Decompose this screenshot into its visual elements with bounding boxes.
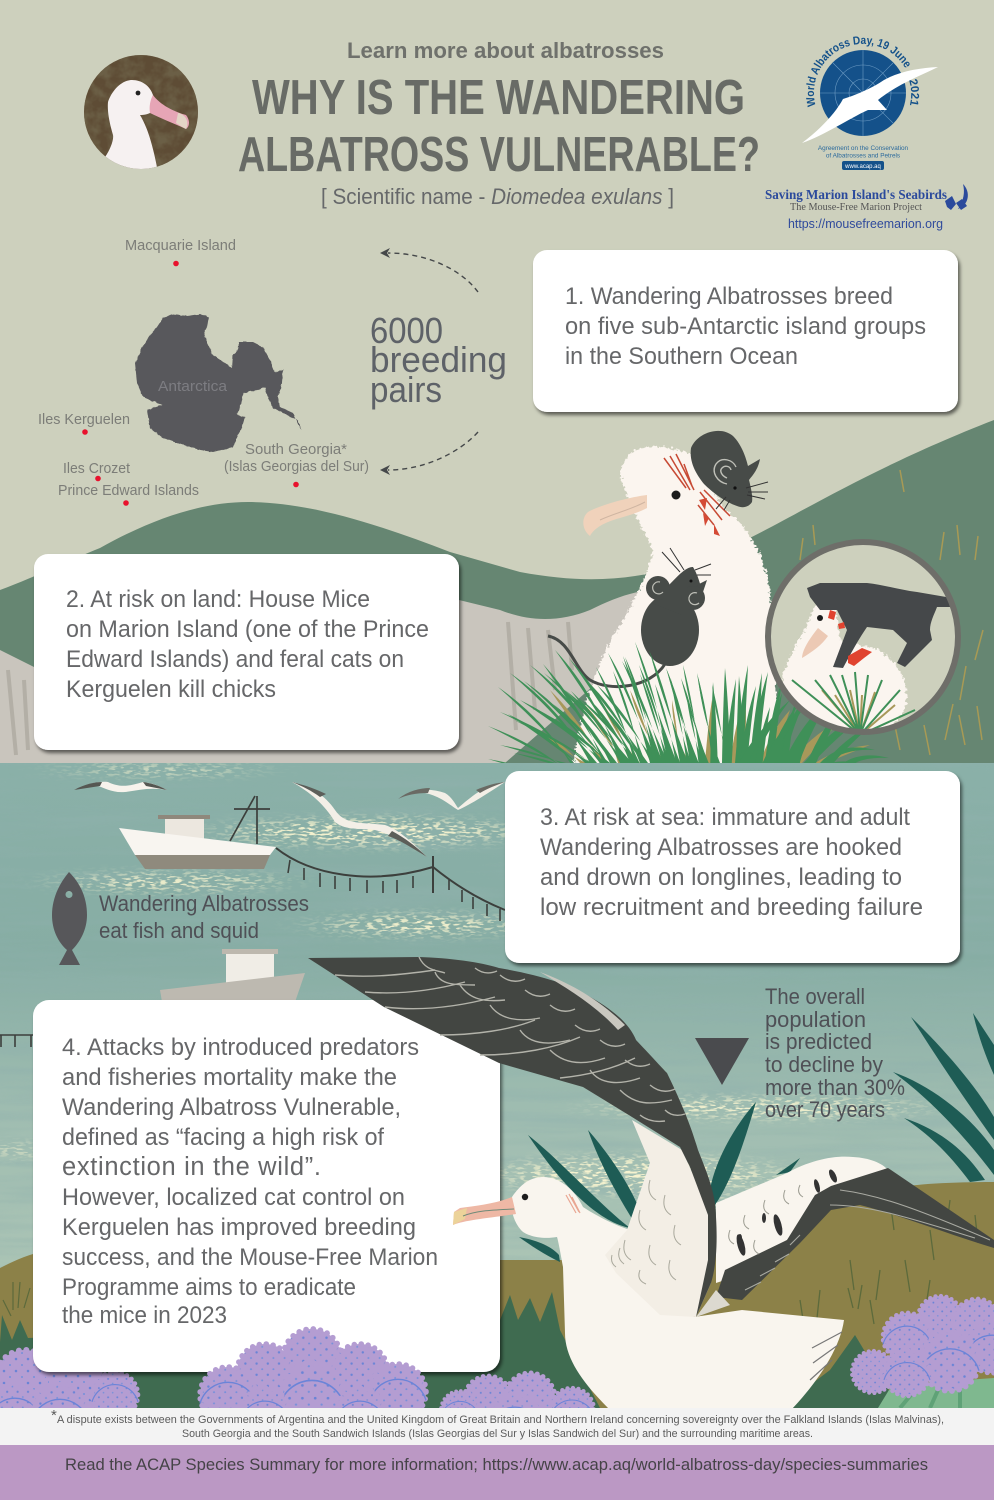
header: learn more: Learn more about albatrosses [347,38,664,63]
stat: population decline: more than 30% [765,1075,905,1100]
map labels and island dots: Iles Crozet [63,460,131,477]
footnote band [0,1407,994,1445]
panel 4: vulnerable status: the mice in 2023 [62,1302,227,1329]
caption: fish and squid [99,891,309,943]
flowers: lilac cluster lower [439,1370,596,1408]
arrow: lower dashed [380,432,478,475]
map labels and island dots: (Islas Georgias del Sur) [224,458,369,475]
right wing [716,1157,994,1300]
map labels and island dots: Macquarie Island [125,237,236,254]
logo: World Albatross Day: of Albatrosses and Petrels [826,152,900,160]
panel 4: vulnerable status: Kerguelen has improved breeding [62,1214,416,1241]
footnote band: A dispute exists between the Governments of Argentina and the United Kingdom of Great Britain and Northern Ireland concerning sovereignty over the Falkland Islands (Islas Malvinas), [57,1414,944,1426]
logo: World Albatross Day: www.acap.aq [844,164,881,170]
birds in flight [74,782,505,857]
panel 1: breeding: on five sub-Antarctic island groups [565,313,926,340]
panel 2: at risk on land: Edward Islands) and feral cats on [66,646,404,673]
background: sky [0,0,994,763]
logo text: Saving Marion Island's Seabirds: https://mousefreemarion.org [788,216,943,231]
boat: grey vessel [160,949,305,1002]
panel 4: vulnerable status [33,1000,500,1372]
icon: decline triangle [695,1038,749,1085]
panel 4: vulnerable status: 4. Attacks by introduced predators [62,1034,419,1061]
stat: population decline: over 70 years [765,1097,885,1122]
stat: population decline: population [765,1007,866,1032]
panel 4: vulnerable status: defined as “facing a high risk of [62,1124,384,1151]
stat: population decline: is predicted [765,1029,872,1054]
footer band [0,1445,994,1500]
panel 1: breeding: 1. Wandering Albatrosses breed [565,283,893,310]
raised wing dark feathers [308,957,717,1317]
panel 4: vulnerable status: success, and the Mouse-Free Marion [62,1244,438,1271]
longline fishing gear [0,848,505,1047]
map labels and island dots: South Georgia* [245,441,347,458]
panel 4: vulnerable status: Wandering Albatross Vulnerable, [62,1094,401,1121]
stat: population decline: to decline by [765,1052,883,1077]
title: WHY IS THE WANDERING [252,71,745,125]
stat: 6000 breeding pairs: pairs [370,369,442,410]
panel 2: at risk on land: on Marion Island (one of the Prince [66,616,429,643]
caption: fish and squid: Wandering Albatrosses [99,891,309,916]
map labels and island dots: Iles Kerguelen [38,411,130,428]
flowers: lilac cluster centre [197,1326,429,1408]
grass tussock [488,642,888,763]
panel 3: at risk at sea: 3. At risk at sea: immature and adult [540,804,910,831]
panel 4: vulnerable status: extinction in the wild”. [62,1153,321,1181]
panel 2: at risk on land: Kerguelen kill chicks [66,676,276,703]
map: Antarctica [135,314,301,452]
body and head [453,1177,844,1410]
mouse: on breast [548,548,711,687]
panel 4: vulnerable status: Programme aims to eradicate [62,1274,356,1301]
arrow: upper dashed [380,248,478,292]
panel 3: at risk at sea: and drown on longlines, leading to [540,864,902,891]
panel 4: vulnerable status: and fisheries mortality make the [62,1064,397,1091]
stat: population decline [765,984,905,1122]
land: olive hills and green ground [0,1182,994,1408]
panel 1: breeding: in the Southern Ocean [565,343,798,370]
leaves: dark teal spikes [519,1013,994,1262]
map labels and island dots [38,237,369,506]
scientific name: [ Scientific name - Diomedea exulans ] [321,184,674,209]
raised wing underside [605,1120,730,1317]
panel 3: at risk at sea: low recruitment and breeding failure [540,894,923,921]
stat: 6000 breeding pairs: 6000 [370,310,443,351]
logo text: Saving Marion Island's Seabirds: The Mouse-Free Marion Project [790,202,922,213]
icon: fish [52,872,87,965]
logo text: Saving Marion Island's Seabirds: Saving Marion Island's Seabirds [765,188,948,203]
map labels and island dots: Prince Edward Islands [58,482,199,499]
panel 4: vulnerable status: However, localized cat control on [62,1184,405,1211]
stat: 6000 breeding pairs [370,310,507,410]
flowers: lilac cluster left [0,1347,140,1408]
logo: World Albatross Day [802,36,938,170]
logo: World Albatross Day: 2021 [909,79,920,106]
footnote band: * [51,1407,57,1424]
panel 2: at risk on land [34,554,459,750]
logo: World Albatross Day: World Albatross Day, 19 June [806,36,910,108]
caption: fish and squid: eat fish and squid [99,918,259,943]
footnote band: South Georgia and the South Sandwich Islands (Islas Georgias del Sur y Islas Sandwich del Sur) and the surrounding maritime areas. [182,1428,813,1440]
landscape: green hills and cliff [0,420,994,763]
title [238,71,760,182]
illustration: albatross chick attacked by mice [488,431,889,777]
stat: population decline: The overall [765,984,865,1009]
logo: World Albatross Day: Agreement on the Conservation [818,145,909,152]
stat: 6000 breeding pairs: breeding [370,339,507,380]
panel 2: at risk on land: 2. At risk on land: House Mice [66,586,370,613]
sea background [0,763,994,1268]
logo text: Saving Marion Island's Seabirds [765,184,968,231]
title: ALBATROSS VULNERABLE? [238,128,760,182]
panel 1: breeding [533,250,958,412]
inset: cat attacking chick [768,542,958,735]
panel 3: at risk at sea [505,771,960,963]
flowers: lilac cluster right [852,1296,994,1408]
panel 3: at risk at sea: Wandering Albatrosses are hooked [540,834,902,861]
illustration: adult wandering albatross [308,957,994,1410]
footer band: Read the ACAP Species Summary for more information; https://www.acap.aq/world-albatross-day/species-summaries [65,1455,928,1474]
mouse: on head [691,431,768,510]
boat: white vessel [119,796,276,869]
label: Antarctica: Antarctica [158,378,228,395]
photo: albatross portrait [84,55,199,172]
